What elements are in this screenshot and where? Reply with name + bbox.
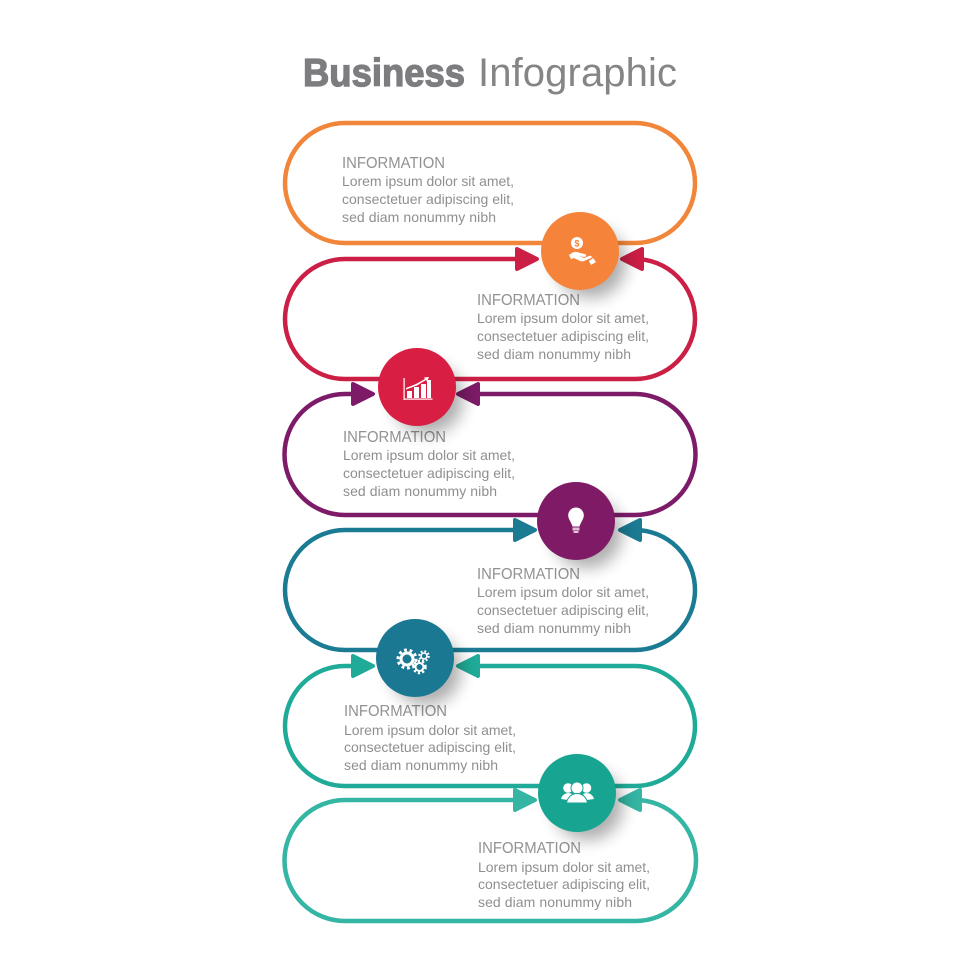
text block 1: consectetuer adipiscing elit, [342, 191, 514, 207]
loop 4: teal blue [285, 520, 695, 650]
text block 6: consectetuer adipiscing elit, [478, 876, 650, 892]
loop 3: purple [284, 384, 696, 515]
icon: gears [398, 650, 429, 673]
icon: hand holding coin: $ [574, 238, 580, 248]
node 3: purple circle with light bulb icon [537, 482, 622, 568]
text block 4: INFORMATION [477, 566, 580, 583]
text block 3 [343, 429, 515, 499]
text block 3: Lorem ipsum dolor sit amet, [343, 447, 515, 463]
text block 5: INFORMATION [344, 703, 447, 720]
loop 6: light green [284, 790, 696, 921]
node 4: teal blue circle with gears icon [376, 619, 461, 705]
text block 2: Lorem ipsum dolor sit amet, [477, 310, 649, 326]
title: Infographic [478, 51, 677, 95]
text block 1: Lorem ipsum dolor sit amet, [342, 173, 514, 189]
text block 5: consectetuer adipiscing elit, [344, 739, 516, 755]
text block 4: Lorem ipsum dolor sit amet, [477, 584, 649, 600]
text block 5: sed diam nonummy nibh [344, 757, 498, 773]
text block 4 [477, 566, 649, 636]
text block 5: Lorem ipsum dolor sit amet, [344, 722, 516, 738]
icon: group of people [561, 782, 594, 803]
text block 1: INFORMATION [342, 155, 445, 172]
text block 2: sed diam nonummy nibh [477, 346, 631, 362]
text block 3: sed diam nonummy nibh [343, 483, 497, 499]
icon: rising bar chart [404, 377, 432, 400]
text block 6 [478, 840, 650, 910]
icon: light bulb [568, 508, 584, 533]
title: Business [303, 52, 465, 95]
text block 6: Lorem ipsum dolor sit amet, [478, 859, 650, 875]
node 2: crimson circle with chart icon [378, 348, 463, 434]
text block 3: consectetuer adipiscing elit, [343, 465, 515, 481]
text block 1: sed diam nonummy nibh [342, 209, 496, 225]
text block 6: INFORMATION [478, 840, 581, 857]
text block 2 [477, 292, 649, 362]
loop 5: green [285, 656, 695, 786]
text block 2: consectetuer adipiscing elit, [477, 328, 649, 344]
node 5: green circle with people icon [538, 754, 623, 840]
text block 3: INFORMATION [343, 429, 446, 446]
node 1: orange circle with money hand icon [541, 212, 626, 298]
text block 6: sed diam nonummy nibh [478, 894, 632, 910]
text block 2: INFORMATION [477, 292, 580, 309]
text block 1 [342, 155, 514, 225]
text block 5 [344, 703, 516, 773]
text block 4: consectetuer adipiscing elit, [477, 602, 649, 618]
text block 4: sed diam nonummy nibh [477, 620, 631, 636]
loop 2: crimson [285, 249, 695, 379]
title [303, 51, 677, 95]
loop 1: orange [285, 123, 695, 243]
